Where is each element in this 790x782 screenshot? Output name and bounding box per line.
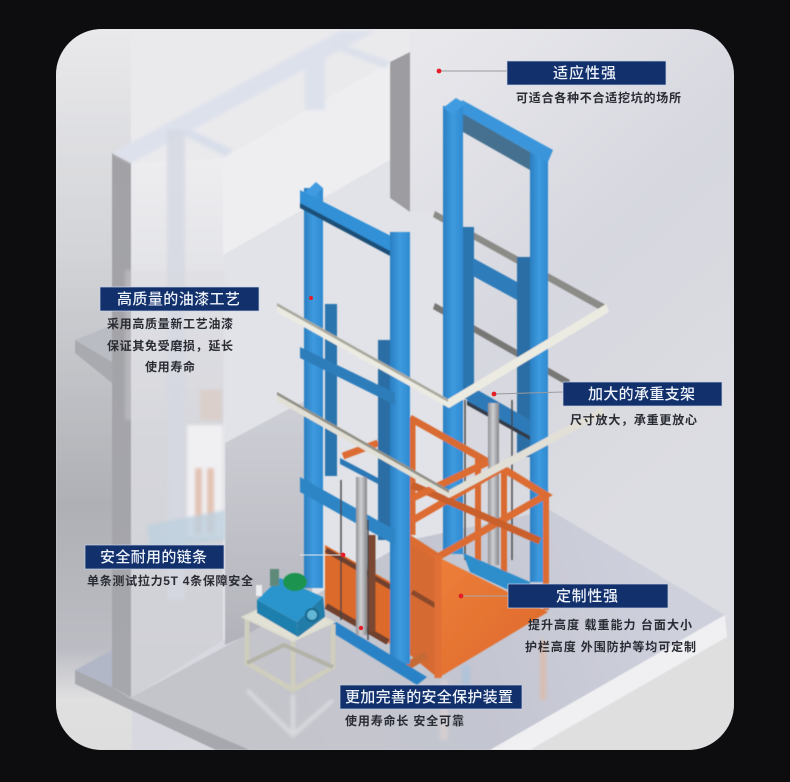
callout: safety devices: 使用寿命长 安全可靠 (345, 713, 464, 728)
callout: load bracket: 加大的承重支架 (588, 386, 695, 403)
hydraulic pump table (243, 598, 334, 690)
callout: adaptability: 适应性强 (553, 64, 616, 82)
callout: customisation: 定制性强 (556, 587, 618, 605)
rear hydraulic cylinder (488, 403, 499, 565)
orange floor and side panel (325, 535, 548, 678)
orange back frame of cage (410, 418, 504, 582)
callout: load bracket: 尺寸放大，承重更放心 (570, 412, 697, 427)
front blue frame (300, 182, 427, 685)
white guide rails (277, 303, 609, 498)
building walls and floor (56, 29, 734, 750)
lift structure (243, 98, 609, 690)
callout: paint process: 采用高质量新工艺油漆 (107, 316, 233, 331)
orange platform base lug (406, 652, 428, 669)
rear guide rails (433, 211, 606, 386)
callout: chain: 单条测试拉力5T 4条保障安全 (87, 573, 253, 588)
rounded background panel (56, 29, 734, 750)
callout: paint process: 高质量的油漆工艺 (117, 291, 240, 308)
floor reflections (247, 640, 546, 740)
callout: customisation: 护栏高度 外围防护等均可定制 (525, 639, 696, 654)
back blue frame (443, 98, 553, 582)
callout: customisation: 提升高度 载重能力 台面大小 (528, 617, 692, 632)
callout: customisation (459, 584, 696, 654)
callout: paint process: 保证其免受磨损，延长 (107, 338, 233, 353)
ghost reflection of frame on wall (112, 32, 388, 544)
callout: adaptability: 可适合各种不合适挖坑的场所 (516, 90, 681, 105)
callout: adaptability (437, 61, 681, 105)
callout: load bracket (492, 382, 722, 427)
callout: paint process (100, 287, 313, 374)
callout: safety devices: 更加完善的安全保护装置 (345, 688, 513, 706)
callout: chain: 安全耐用的链条 (100, 548, 207, 566)
front hydraulic cylinder (356, 477, 367, 635)
callout: chain (85, 545, 345, 588)
callout: paint process: 使用寿命 (145, 359, 195, 374)
hydraulic pump unit (256, 569, 325, 637)
callout: safety devices (340, 626, 522, 728)
orange top frame of cage (343, 443, 546, 678)
